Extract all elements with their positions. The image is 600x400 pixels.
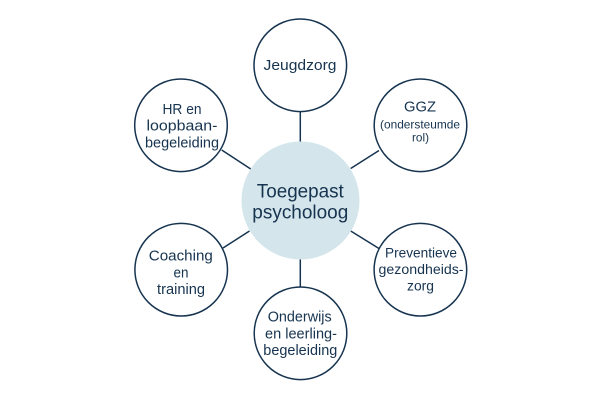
node: Jeugdzorg [254,19,347,112]
node: Onderwijs en leerlingbegeleiding [254,287,347,380]
connector: HR [222,150,251,169]
connector: Coaching [223,231,250,248]
node: GGZ: rol) [412,131,429,145]
node: Onderwijs en leerlingbegeleiding: begeleiding [263,343,337,359]
central node: psycholoog [252,202,348,224]
node: GGZ: GGZ [404,99,436,116]
connector: GGZ [351,150,379,168]
node: HR en loopbaanbegeleiding: loopbaan- [146,119,218,135]
node: HR en loopbaanbegeleiding: HR en [162,102,202,118]
central node [242,142,360,260]
node: Coaching en training: training [157,281,205,298]
node: HR en loopbaanbegeleiding [135,79,227,172]
node: Coaching en training [135,223,228,316]
connector: Jeugdzorg [299,112,301,142]
central node: Toegepast [257,180,344,202]
node: Coaching en training: en [174,264,188,281]
node: Jeugdzorg: Jeugdzorg [264,57,336,74]
connector: Onderwijs [299,258,301,287]
node: Preventieve gezondheidszorg: zorg [407,278,434,294]
connector: Preventieve gezondheidszorg [351,231,379,248]
node: Preventieve gezondheidszorg: gezondheids- [378,261,464,277]
node: HR en loopbaanbegeleiding: begeleiding [145,135,219,151]
node: Onderwijs en leerlingbegeleiding: en leerling- [265,326,337,342]
node: Coaching en training: Coaching [149,248,213,265]
node: Onderwijs en leerlingbegeleiding: Onderwijs [268,310,332,326]
node: GGZ: (ondersteumde [380,117,460,131]
node: Preventieve gezondheidszorg [374,223,467,316]
node: GGZ [374,79,467,172]
node: Preventieve gezondheidszorg: Preventieve [385,244,457,260]
